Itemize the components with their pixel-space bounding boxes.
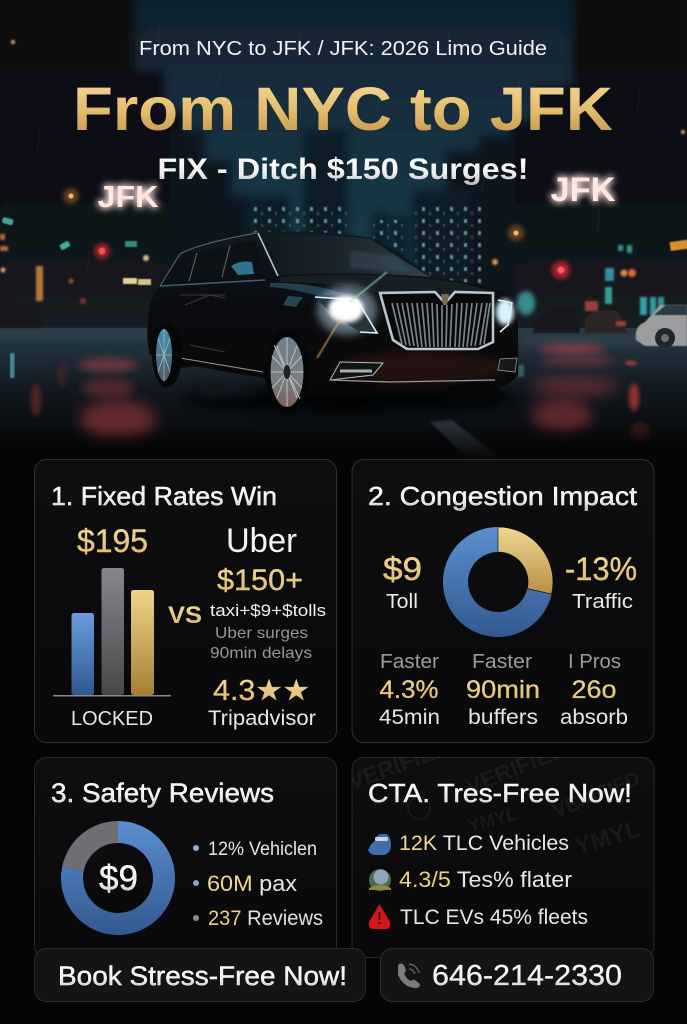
rating source: Tripadvisor bbox=[208, 707, 316, 730]
windshield bbox=[266, 235, 430, 277]
legend: 237 Reviews bbox=[208, 907, 323, 930]
hero: rainy night city street bbox=[0, 0, 687, 460]
watermark stamps: VERIFIED bbox=[550, 768, 643, 823]
stat column 3: absorb bbox=[560, 706, 628, 729]
stat column 1: 45min bbox=[379, 706, 440, 729]
stat column 1: 4.3% bbox=[380, 676, 438, 704]
hood bbox=[280, 275, 498, 296]
icon: warning bbox=[369, 904, 390, 929]
watermark stamps: YMYL bbox=[572, 815, 644, 861]
panel: safety reviews bbox=[34, 758, 336, 958]
legend bbox=[193, 839, 323, 930]
legend: 12% Vehiclen bbox=[208, 839, 317, 860]
wet reflections bbox=[10, 344, 650, 460]
button: book now bbox=[34, 948, 366, 1002]
watermark stamps: YMYL bbox=[466, 804, 519, 836]
stat column 2: Faster bbox=[472, 651, 532, 673]
lower bumper bbox=[330, 358, 517, 382]
stat column 2: 90min bbox=[466, 676, 540, 704]
watermark stamps: VERIFIED bbox=[345, 734, 453, 795]
heading: 2. Congestion Impact bbox=[368, 481, 638, 511]
rating: 4.3★★ bbox=[213, 675, 310, 707]
sill trim bbox=[180, 358, 263, 372]
neon sign: JFK right: JFK bbox=[550, 171, 616, 209]
main title: From NYC to JFK bbox=[73, 75, 613, 143]
car shadow bbox=[180, 387, 520, 413]
stat column 3 bbox=[560, 651, 628, 729]
uber comparison: $150+ bbox=[217, 564, 303, 597]
stat column 1: Faster bbox=[380, 651, 439, 673]
donut chart bbox=[61, 821, 175, 935]
heading: 1. Fixed Rates Win bbox=[51, 481, 277, 511]
door reflections bbox=[180, 295, 225, 352]
blurred city backdrop bbox=[0, 0, 687, 340]
toll stat bbox=[383, 551, 422, 613]
icon: helmet bbox=[369, 869, 391, 891]
city lights bbox=[0, 40, 687, 315]
panel: congestion impact bbox=[352, 460, 654, 742]
button: phone number: 646-214-2330 bbox=[432, 960, 622, 992]
car body bbox=[147, 231, 518, 395]
toll stat: $9 bbox=[383, 551, 422, 587]
rain bbox=[37, 20, 640, 272]
traffic stat: Traffic bbox=[572, 591, 633, 613]
button: book now: Book Stress-Free Now! bbox=[58, 961, 347, 991]
icon: phone bbox=[398, 964, 420, 988]
grille bbox=[380, 292, 493, 349]
warm lower front tint bbox=[335, 352, 505, 384]
donut value: $9 bbox=[99, 859, 138, 898]
window chrome bbox=[160, 233, 257, 286]
stat column 1 bbox=[379, 651, 440, 729]
stat column 3: 26o bbox=[572, 676, 616, 704]
uber comparison: Uber bbox=[226, 522, 297, 560]
heading: 3. Safety Reviews bbox=[51, 778, 274, 808]
watermark stamps: VERIFIED bbox=[462, 736, 570, 800]
price: $195: $195 bbox=[77, 523, 148, 559]
panel: call to action bbox=[352, 757, 654, 958]
stat column 3: I Pros bbox=[568, 651, 621, 673]
tagline: FIX - Ditch $150 Surges! bbox=[158, 153, 528, 186]
background cars bbox=[0, 301, 687, 348]
toll stat: Toll bbox=[386, 591, 418, 613]
mirror bbox=[231, 262, 254, 275]
neon sign: JFK left: JFK bbox=[98, 179, 159, 214]
traffic stat bbox=[565, 551, 637, 613]
side windows bbox=[254, 241, 256, 243]
uber comparison: taxi+$9+$tolls bbox=[210, 601, 326, 620]
road bbox=[0, 328, 687, 432]
uber comparison: 90min delays bbox=[210, 645, 312, 662]
stat column 2: buffers bbox=[468, 706, 538, 729]
traffic stat: -13% bbox=[565, 551, 637, 587]
row: fleets: TLC EVs 45% fleets bbox=[400, 905, 588, 929]
panel: fixed rates bbox=[34, 460, 336, 742]
stat column 2 bbox=[466, 651, 540, 729]
bar label: LOCKED bbox=[71, 707, 153, 730]
watermark stamps bbox=[352, 757, 641, 853]
heading: CTA. Tres-Free Now! bbox=[368, 778, 632, 808]
button: phone number bbox=[380, 948, 654, 1002]
row: rating: 4.3/5 Tes% flater bbox=[399, 867, 572, 892]
subtitle: From NYC to JFK / JFK: 2026 Limo Guide bbox=[139, 37, 547, 60]
car bbox=[147, 231, 520, 415]
headlights bbox=[315, 272, 514, 358]
uber comparison: Uber surges bbox=[215, 625, 308, 642]
row: vehicles: 12K TLC Vehicles bbox=[399, 831, 569, 855]
icon: vehicle bbox=[368, 834, 391, 855]
legend: 60M pax bbox=[207, 871, 297, 896]
donut chart bbox=[443, 527, 553, 637]
bar chart bbox=[53, 568, 171, 696]
wheels bbox=[152, 323, 504, 415]
distant lit windows bbox=[252, 205, 482, 285]
vs label: VS bbox=[168, 602, 202, 629]
belt line bbox=[160, 280, 265, 286]
uber comparison bbox=[210, 522, 326, 662]
